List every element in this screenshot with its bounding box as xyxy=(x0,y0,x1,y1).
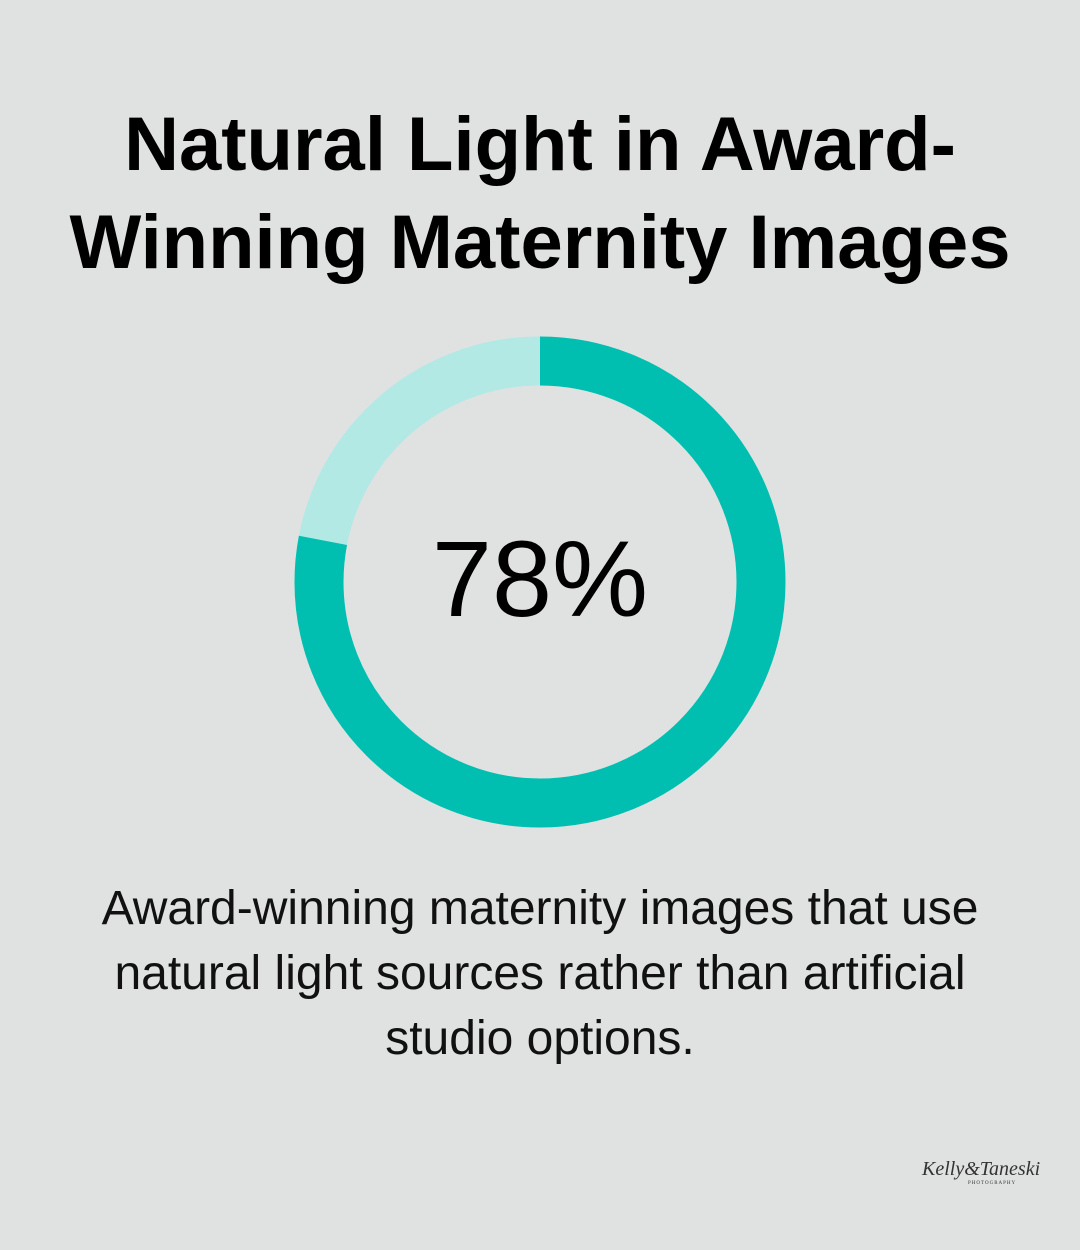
title: Winning Maternity Images xyxy=(70,200,1010,285)
logo: PHOTOGRAPHY xyxy=(968,1181,1016,1186)
description text: Award-winning maternity images that use xyxy=(102,882,978,935)
logo: Kelly&Taneski xyxy=(922,1158,1040,1180)
title xyxy=(70,102,1010,285)
title: Natural Light in Award- xyxy=(124,102,956,187)
donut chart: 78% xyxy=(432,518,648,639)
description text xyxy=(102,882,978,1065)
description text: studio options. xyxy=(385,1012,695,1065)
description text: natural light sources rather than artificial xyxy=(114,947,966,1000)
